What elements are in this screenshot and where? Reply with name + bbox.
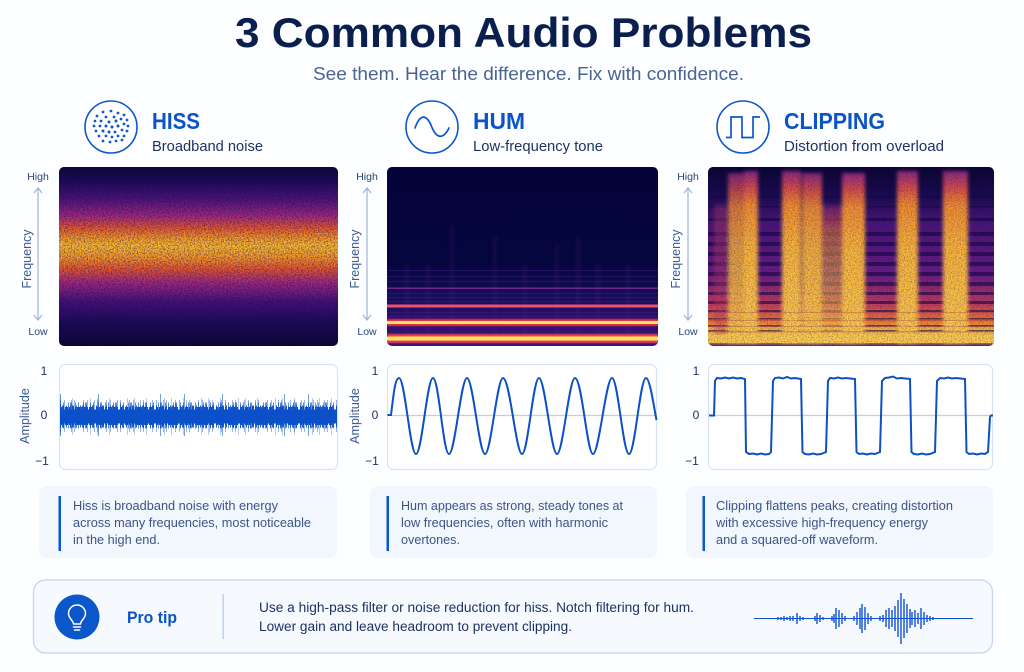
frequency axis: High (356, 171, 378, 183)
spectrogram: hum (387, 167, 658, 346)
label: pro tip: Pro tip (127, 608, 177, 627)
divider line (222, 594, 224, 639)
waveform: hiss: Amplitude (18, 388, 32, 444)
callout: clipping: Clipping flattens peaks, creating distortion (716, 499, 953, 513)
spectrogram: clipping (708, 167, 994, 346)
panel: hiss (18, 101, 338, 558)
frequency axis: Frequency (20, 229, 34, 289)
frequency axis (348, 171, 378, 338)
heading: HUM: HUM (473, 108, 525, 134)
waveform: hiss: 0 (41, 408, 48, 422)
spectrogram: hiss (59, 167, 338, 346)
tip text (259, 600, 694, 634)
waveform: hum: −1 (365, 454, 379, 468)
heading: CLIPPING: CLIPPING (784, 108, 885, 134)
panel: pro tip (34, 580, 992, 653)
subtitle: See them. Hear the difference. Fix with confidence. (313, 64, 744, 84)
icon: square wave (717, 101, 769, 153)
subheading: Low-frequency tone (473, 139, 603, 155)
icon: small waveform (754, 593, 973, 644)
frequency axis: High (677, 171, 699, 183)
callout: hum (370, 486, 657, 558)
waveform: hum: Amplitude (348, 388, 362, 444)
icon: hiss noise dots (85, 101, 137, 153)
callout: clipping: with excessive high-frequency energy (715, 516, 929, 530)
callout: hiss: Hiss is broadband noise with energy (73, 499, 279, 513)
frequency axis: Low (678, 326, 698, 338)
callout: hiss: across many frequencies, most noticeable (73, 516, 311, 530)
tip text: Use a high-pass filter or noise reduction for hiss. Notch filtering for hum. (259, 600, 694, 615)
frequency axis: Frequency (348, 229, 362, 289)
frequency axis: Frequency (669, 229, 683, 289)
callout: hum: Hum appears as strong, steady tones at (401, 499, 624, 513)
waveform: hum: 0 (372, 408, 379, 422)
subheading: Broadband noise (152, 139, 263, 155)
panel: clipping (669, 101, 994, 558)
callout: hiss: in the high end. (73, 533, 160, 547)
frequency axis (20, 171, 49, 338)
waveform: hum (348, 364, 656, 470)
heading: HISS: HISS (152, 108, 200, 134)
waveform: hum: 1 (372, 364, 379, 378)
icon: light bulb (54, 594, 100, 640)
callout: hum: low frequencies, often with harmonic (401, 516, 608, 530)
callout: hum: overtones. (401, 533, 460, 547)
subheading: Distortion from overload (784, 139, 944, 155)
callout: hiss (39, 486, 337, 558)
callout: clipping (686, 486, 993, 558)
waveform: clipping: −1 (685, 454, 699, 468)
tip text: Lower gain and leave headroom to prevent clipping. (259, 619, 572, 634)
frequency axis (669, 171, 699, 338)
title: 3 Common Audio Problems (235, 9, 812, 56)
frequency axis: Low (28, 326, 48, 338)
callout: clipping: and a squared-off waveform. (716, 533, 878, 547)
icon: sine wave (406, 101, 458, 153)
frequency axis: High (27, 171, 49, 183)
panel: hum (348, 101, 658, 558)
waveform: hiss (18, 364, 338, 470)
waveform: clipping: 0 (693, 408, 700, 422)
frequency axis: Low (357, 326, 377, 338)
waveform: hiss: 1 (41, 364, 48, 378)
waveform: clipping: 1 (693, 364, 700, 378)
waveform: clipping (685, 364, 993, 470)
waveform: hiss: −1 (35, 454, 49, 468)
